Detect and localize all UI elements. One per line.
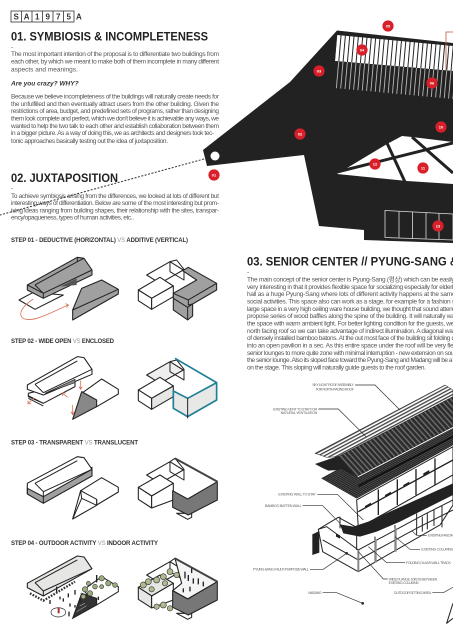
louvers [335, 35, 453, 71]
numbered markers [208, 20, 447, 232]
logo: SA1975A id boxes: S [14, 13, 20, 22]
label: bamboo wall [265, 504, 340, 523]
roof: gable frame [315, 456, 356, 476]
dotted juxtaposition line [0, 159, 204, 215]
step 01 diagrams [19, 257, 217, 320]
text block: juxtaposition: interesting ways of differentiation. Below are some of the most interesting but prom- [11, 200, 219, 207]
text block: symbiosis body: Because we believe incompleteness of the buildings will naturally create needs for [11, 94, 220, 100]
logo: SA1975A id boxes: 9 [45, 13, 50, 22]
label: pyung-sang wall [253, 553, 347, 572]
label: existing columns [395, 537, 453, 552]
step 03 title: STEP 03 - TRANSPARENT VS TRANSLUCENT [11, 440, 138, 446]
skylight outline [446, 32, 453, 70]
text block: symbiosis body: tonic approaches basically testing out the idea of juxtaposition. [11, 138, 168, 145]
logo: SA1975A id boxes: 7 [56, 13, 61, 22]
logo: SA1975A id boxes [11, 11, 82, 22]
folding glass doors [422, 506, 442, 532]
label: existing fascia: EXISTING FASCIA [428, 534, 453, 538]
label: wide flange: EXISTING COLUMNS [389, 581, 419, 585]
roof: dark upper panel [338, 397, 453, 477]
label: skylight [312, 383, 400, 410]
numbered markers: 03 [317, 68, 322, 74]
step 02 diagrams [27, 357, 217, 419]
label: existing columns: EXISTING COLUMNS [421, 548, 453, 552]
label: existing fascia [412, 531, 453, 538]
step 04 diagrams [27, 556, 217, 619]
subheading: are you crazy: Are you crazy? WHY? [10, 80, 79, 88]
label: vent: NATURAL VENTILATION [281, 411, 318, 415]
numbered markers: 01 [212, 172, 217, 178]
label: outdoor sitting: OUTDOOR SITTING AREA [394, 591, 432, 595]
text block: symbiosis body: the unfulfilled and then eventually attract users from the other building. Given the [11, 101, 219, 108]
text block: symbiosis body: in a bigger picture. As a way of doing this, we as architects and designers took tec- [11, 130, 214, 137]
text block: senior center: - [247, 269, 249, 276]
text block: symbiosis intro: - [11, 44, 13, 51]
label: vent [273, 407, 366, 437]
label: existing wall [278, 493, 363, 520]
numbered markers: 13 [436, 224, 441, 228]
courtyard windows [337, 136, 453, 184]
text block: juxtaposition: - [11, 185, 13, 192]
exploded axonometric drawing [253, 383, 453, 623]
text block: senior center [247, 269, 453, 372]
label: pyung-sang wall: PYUNG-SANG / MULTI-PURPOSE WALL [253, 568, 309, 572]
label: madang: MADANG [308, 591, 322, 595]
logo: SA1975A id boxes: 5 [66, 13, 71, 22]
logo: SA1975A id boxes: A [76, 13, 82, 22]
text block: juxtaposition: ising ideas ranging from building shapes, their relationship with the sites, transpar- [11, 208, 219, 214]
lower grid [385, 210, 453, 240]
step 02 title: STEP 02 - WIDE OPEN VS ENCLOSED [11, 339, 115, 345]
numbered markers: 11 [421, 166, 426, 170]
bamboo batten band [340, 483, 453, 537]
label: skylight: FOR NORTH FACING ROOF [316, 387, 355, 391]
numbered markers: 10 [439, 124, 444, 130]
step 04 title: STEP 04 - OUTDOOR ACTIVITY VS INDOOR ACTIVITY [11, 541, 158, 547]
label: skylight: SKY LIGHT ROOF ASSEMBLY [312, 383, 355, 387]
label: folding track [368, 547, 452, 565]
text block: symbiosis body [10, 94, 220, 145]
black roof plan shape [203, 30, 453, 243]
text block: senior center: on the stage. This sloping will naturally guide guests to the roof garden. [247, 364, 426, 372]
step 03 diagrams [27, 457, 217, 519]
text block: symbiosis body: restrictions of area, budget, and predefined sets of programs, rather than designing [11, 108, 219, 115]
text block: symbiosis intro: The most important intention of the proposal is to differentiate two buildings from [11, 51, 219, 58]
numbered markers: 05 [386, 24, 391, 28]
walls [357, 447, 453, 528]
tag hole [210, 152, 220, 160]
text block: symbiosis intro [11, 44, 219, 74]
roof: lower panel [322, 428, 453, 498]
logo: SA1975A id boxes: A [24, 13, 30, 22]
label: existing wall: EXISTING WALL TO STAY [278, 493, 317, 497]
text block: juxtaposition: ency/opaqueness, types of human activities, etc.. [11, 214, 134, 222]
text block: symbiosis body: wanted to help the two talk to each other and establish collaboration between them [10, 123, 219, 130]
label: folding track: FOLDING GLASS WALL TRACK [406, 561, 452, 565]
label: madang [308, 591, 364, 605]
label: bamboo wall: BAMBOO BATTEN WALL [265, 504, 302, 508]
logo: SA1975A id boxes: 1 [35, 13, 40, 22]
label: outdoor sitting [394, 587, 453, 595]
label: wide flange [358, 552, 438, 585]
label: vent: EXISTING VENT TO STAY FOR [273, 407, 318, 411]
numbered markers: 02 [298, 132, 303, 136]
numbered markers: 06 [430, 80, 435, 86]
end wall [312, 531, 319, 555]
text block: juxtaposition [11, 185, 219, 222]
heading: 01 symbiosis: 01. SYMBIOSIS & INCOMPLETENESS [11, 30, 208, 44]
label: wide flange: WIDE FLANGE JOISTS BETWEEN [389, 577, 438, 581]
step 01 title: STEP 01 - DEDUCTIVE (HORIZONTAL) VS ADDITIVE (VERTICAL) [11, 238, 188, 244]
floor and frame [318, 475, 453, 572]
outdoor seating outline [447, 603, 453, 623]
text block: symbiosis intro: each other, by which we meant to make both of them incomplete in many different [11, 58, 219, 66]
numbered markers: 12 [373, 162, 378, 166]
text block: symbiosis body: them look complete and perfect, which we don't believe it is achievable any ways, we [11, 116, 219, 122]
roof: skylight slats [315, 385, 453, 457]
text block: juxtaposition: To achieve symbiosis arising from the differences, we looked at lots of different but [11, 193, 219, 200]
numbered markers: 04 [360, 48, 365, 52]
text block: symbiosis intro: aspects and meanings. [11, 66, 78, 74]
heading: 02 juxtaposition: 02. JUXTAPOSITION [11, 172, 118, 185]
